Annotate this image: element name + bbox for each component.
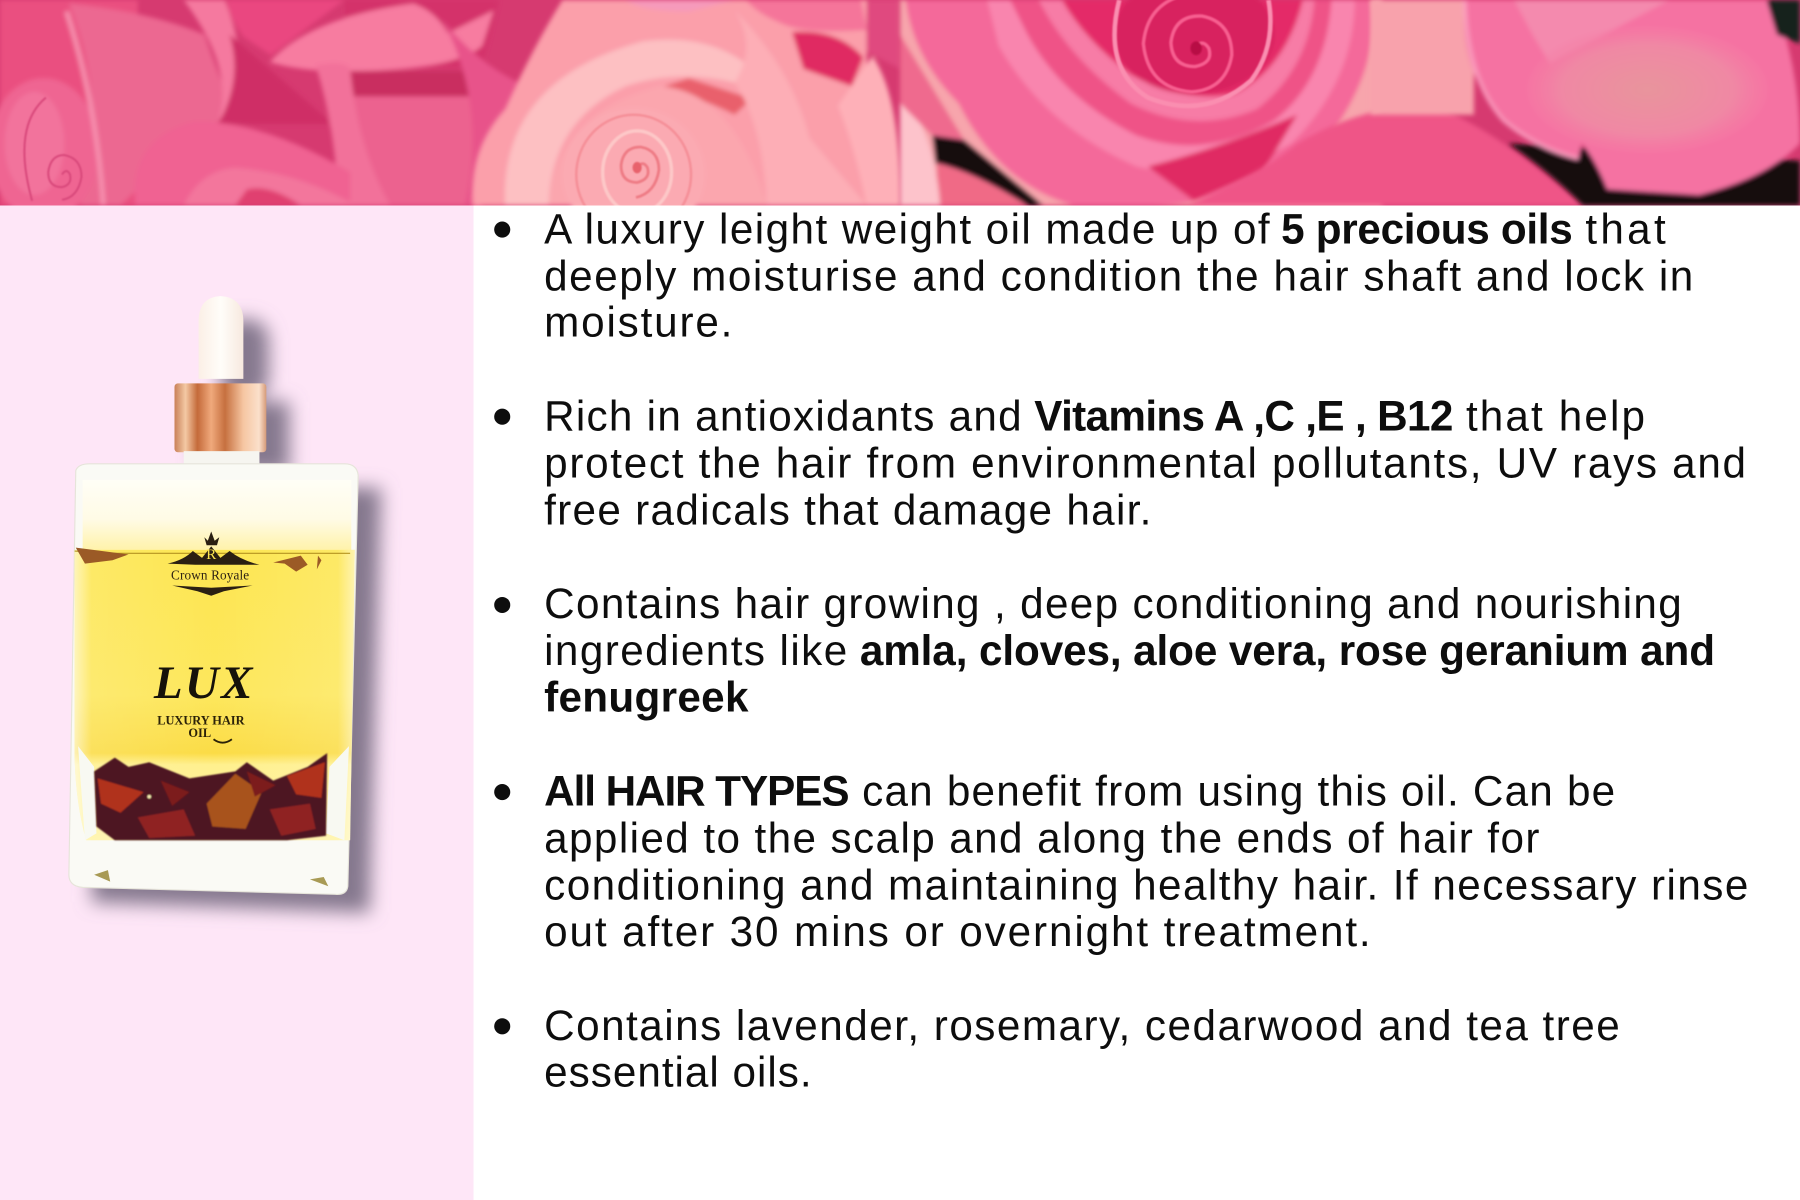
bullet 4	[494, 767, 1748, 955]
bottle drop shadow	[92, 319, 381, 913]
bullet text: that	[1585, 205, 1666, 252]
centre light pink rose	[470, 0, 902, 206]
product name: LUX	[153, 657, 254, 709]
bullet dot	[494, 784, 510, 800]
rose photo banner	[0, 0, 1800, 206]
bullet text	[544, 580, 1715, 721]
bottom glass flecks	[94, 870, 328, 886]
large deep pink rose	[900, 0, 1382, 205]
bullet text: applied to the scalp and along the ends of hair for	[544, 814, 1539, 861]
floating petals at surface	[76, 548, 321, 572]
bullet dot	[494, 222, 510, 238]
bullet text: free radicals that damage hair.	[544, 487, 1151, 534]
lower petal	[1187, 103, 1583, 205]
bullet 5	[494, 1002, 1620, 1096]
product subtitle line 2: OIL	[188, 726, 211, 740]
bullet text: fenugreek	[544, 674, 749, 721]
glass neck	[184, 451, 259, 472]
bullet dot	[494, 597, 510, 613]
left pink panel	[0, 205, 474, 1200]
glass body	[69, 464, 358, 894]
oil side refraction	[75, 550, 355, 840]
product bottle	[69, 296, 381, 913]
bullet text: Rich in antioxidants and	[544, 392, 1022, 439]
bullet text	[544, 767, 1748, 955]
logo smile mark	[214, 739, 232, 743]
banner base colour	[0, 0, 1800, 205]
copper collar	[174, 383, 266, 452]
dropper bulb	[199, 296, 243, 379]
bullet text: conditioning and maintaining healthy hair. If necessary rinse	[544, 861, 1748, 908]
logo wordmark: Crown Royale	[171, 568, 249, 583]
bullet text: that help	[1466, 392, 1645, 439]
bullet text: moisture.	[544, 298, 732, 345]
bullet text: All HAIR TYPES	[544, 767, 849, 814]
product subtitle line 1: LUXURY HAIR	[157, 713, 246, 727]
left rose spiral	[24, 98, 82, 201]
bullet text: essential oils.	[544, 1049, 812, 1096]
yellow oil	[75, 550, 355, 840]
bullet 2	[494, 392, 1746, 534]
centre rose spiral	[574, 113, 692, 206]
bullet text: Contains lavender, rosemary, cedarwood and tea tree	[544, 1002, 1620, 1049]
bullet dot	[494, 409, 510, 425]
bullet text: A luxury leight weight oil made up of	[544, 205, 1270, 252]
bullet text: ingredients like	[544, 627, 847, 674]
bullet text: protect the hair from environmental pollutants, UV rays and	[544, 440, 1746, 487]
bullet text: 5 precious oils	[1281, 205, 1573, 252]
bullet text	[544, 205, 1693, 345]
bullet text	[544, 392, 1746, 534]
left roses	[0, 0, 528, 220]
logo ornament	[168, 532, 259, 596]
bullet text: deeply moisturise and condition the hair shaft and lock in	[544, 252, 1693, 299]
upper glass clear area	[83, 480, 351, 551]
bullet text: amla, cloves, aloe vera, rose geranium and	[860, 627, 1715, 674]
bullet text	[544, 1002, 1620, 1096]
logo initial: R	[206, 547, 216, 563]
right petal and dark background	[1371, 0, 1800, 205]
bullet 1	[494, 205, 1693, 345]
brand logo: Crown Royale	[168, 532, 259, 596]
bullet dot	[494, 1018, 510, 1034]
bullet text: out after 30 mins or overnight treatment.	[544, 908, 1371, 955]
rose petals at base	[94, 753, 327, 840]
bullet text: can benefit from using this oil. Can be	[862, 767, 1615, 814]
bullet text: Contains hair growing , deep conditioning and nourishing	[544, 580, 1682, 627]
bullet text: Vitamins A ,C ,E , B12	[1034, 392, 1453, 439]
large rose spiral	[1115, 0, 1270, 106]
oil surface line	[75, 551, 350, 553]
bullet 3	[494, 580, 1715, 721]
lower corner highlights	[78, 746, 349, 840]
